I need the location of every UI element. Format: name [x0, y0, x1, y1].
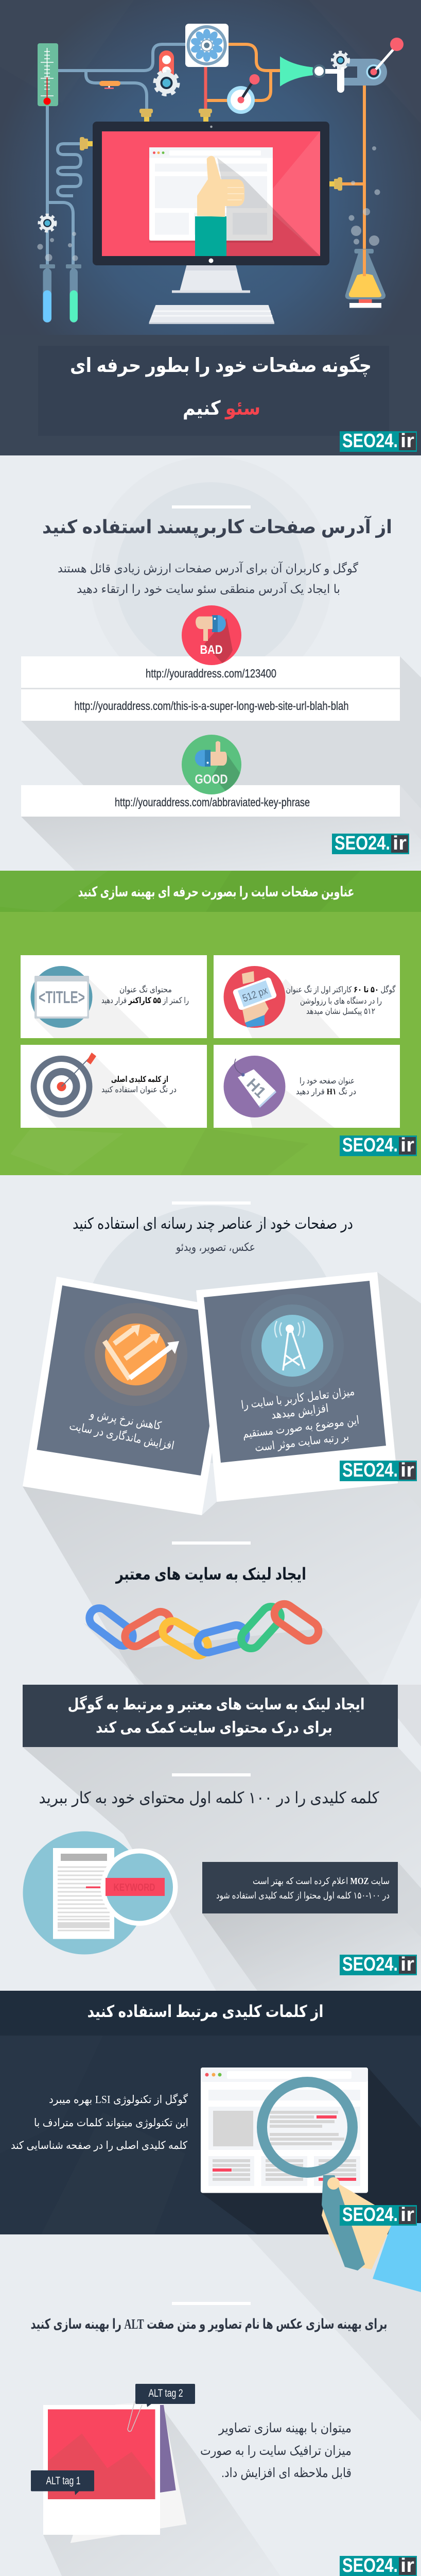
title line 1: چگونه صفحات خود را بطور حرفه ای — [70, 354, 372, 377]
card: H1: در تگ H۱ قرار دهید — [296, 1087, 356, 1097]
logo: SEO24. — [342, 430, 398, 452]
card: H1: H1 — [243, 1075, 269, 1101]
paragraph — [58, 561, 358, 596]
icon: good: GOOD — [195, 772, 227, 787]
icon: fan — [185, 24, 229, 67]
card: 512 px: 512 px — [241, 985, 269, 1005]
card: keyword in title: در تگ عنوان استفاده کنید — [101, 1084, 177, 1095]
logo: SEO24. — [335, 833, 390, 854]
card: H1 — [214, 1045, 400, 1128]
paragraph — [11, 2093, 188, 2151]
url box: good — [21, 785, 400, 817]
logo: ir — [400, 1460, 414, 1481]
heading: ایجاد لینک به سایت های معتبر — [115, 1565, 306, 1584]
icon: flask — [345, 249, 385, 308]
icon: magnifier and hand — [262, 2082, 421, 2292]
logo: ir — [400, 1134, 414, 1156]
paragraph: میزان ترافیک سایت را به صورت — [200, 2444, 352, 2458]
paragraph: قابل ملاحظه ای افزایش داد. — [221, 2466, 352, 2480]
tag: ALT 1 — [31, 2470, 94, 2495]
logo: ir — [400, 2204, 414, 2226]
panel: friendly URLs — [0, 455, 421, 871]
panel: title tag — [0, 871, 421, 1175]
browser window — [149, 147, 273, 243]
heading: کلمه کلیدی را در ۱۰۰ کلمه اول محتوای خود به کار ببرید — [39, 1789, 379, 1807]
card: keyword in title — [21, 1045, 207, 1128]
card: 512 px: گوگل ۵۰ تا ۶۰ کاراکتر اول از تگ عنوان — [286, 985, 396, 995]
url box: bad 2: http://youraddress.com/this-is-a-super-long-web-site-url-blah-blah — [74, 699, 349, 713]
icon: bad: BAD — [200, 643, 222, 657]
tag: ALT 1: ALT tag 1 — [46, 2475, 80, 2487]
icon: chain — [85, 1600, 322, 1659]
card: title tag: <TITLE> — [39, 988, 85, 1007]
paragraph: میتوان با بهینه سازی تصاویر — [218, 2421, 352, 2436]
icon: thumbs up hand — [195, 156, 244, 256]
icon: lever assembly — [332, 38, 404, 93]
pipes: grey-blue network — [47, 44, 185, 294]
logo: SEO24. — [342, 1134, 398, 1156]
icon: monitor — [93, 122, 329, 293]
logo: SEO24. — [342, 1460, 398, 1481]
icon: good — [182, 735, 241, 794]
callout: links: برای درک محتوای سایت کمک می کند — [96, 1719, 332, 1736]
icon: dial — [227, 74, 259, 114]
paragraph: کلمه کلیدی اصلی را در صفحه شناسایی کند — [11, 2140, 187, 2151]
pipes: orange and red — [206, 44, 364, 276]
title box — [38, 346, 389, 436]
icon: valve — [99, 81, 120, 89]
title line 2: سئو کنیم — [183, 398, 260, 420]
logo: ir — [400, 2555, 414, 2576]
card: H1: عنوان صفحه خود را — [300, 1077, 355, 1086]
card: bounce rate — [23, 1277, 236, 1515]
logo: ir — [400, 1954, 414, 1975]
card: title tag: را کمتر از ۵۵ کاراکتر قرار دهید — [101, 996, 189, 1006]
card: 512 px — [214, 955, 400, 1038]
heading: از کلمات کلیدی مرتبط استفاده کنید — [87, 2002, 323, 2021]
card: title tag: محتوای تگ عنوان — [119, 985, 172, 995]
tag: ALT 2 — [135, 2384, 195, 2407]
callout: moz: در ۱۰۰-۱۵۰ کلمه اول محتوا از کلمه کلیدی استفاده شود — [216, 1890, 390, 1901]
logo: ir — [400, 430, 414, 452]
browser window — [201, 2067, 368, 2193]
url box: bad 1 — [21, 656, 400, 689]
card: keyword in title: از کلمه کلیدی اصلی — [111, 1075, 168, 1084]
paragraph: با ایجاد یک آدرس منطقی سئو سایت خود را ارتقاء دهید — [77, 582, 340, 596]
panel: hero — [0, 0, 421, 455]
card: engagement — [196, 1272, 398, 1502]
card: 512 px: را در دستگاه های با رزولوشن — [300, 996, 382, 1006]
url box: bad 1: http://youraddress.com/123400 — [146, 667, 276, 680]
card: bounce rate: کاهش نرخ پرش و — [89, 1407, 163, 1433]
logo: ir — [393, 833, 407, 854]
card: engagement: این موضوع به صورت مستقیم — [242, 1413, 360, 1441]
icon: thermometer — [38, 43, 58, 106]
icon: test tubes — [39, 215, 81, 323]
paragraph: گوگل از تکنولوژی LSI بهره میبرد — [49, 2093, 188, 2106]
icon: bad — [182, 605, 241, 665]
paragraph: گوگل و کاربران آن برای آدرس صفحات ارزش زیادی قائل هستند — [58, 561, 358, 575]
callout: moz — [202, 1862, 421, 1991]
card: engagement: میزان تعامل کاربر با سایت را — [240, 1385, 355, 1411]
card: engagement: افزایش میدهد — [270, 1401, 329, 1422]
url box: bad 2 — [21, 689, 400, 721]
icon: connectors — [80, 109, 342, 191]
icon: signal with gear — [154, 50, 178, 95]
logo: SEO24. — [342, 2204, 398, 2226]
logo: SEO24. — [342, 2555, 398, 2576]
card: engagement: بر رتبه سایت موثر است — [254, 1430, 349, 1454]
bubbles — [37, 146, 380, 261]
card: title tag — [21, 955, 207, 1038]
url box: good: http://youraddress.com/abbraviated-key-phrase — [115, 795, 310, 809]
tag: ALT 2: ALT tag 2 — [148, 2387, 183, 2399]
panel: image ALT — [0, 2234, 421, 2576]
icon: horn — [280, 57, 340, 87]
card: bounce rate: افزایش ماندگاری در سایت — [68, 1419, 176, 1453]
callout: moz: سایت MOZ اعلام کرده است که بهتر است — [253, 1876, 390, 1887]
callout: links — [23, 1685, 398, 1747]
paragraph: این تکنولوژی میتواند کلمات مترادف با — [34, 2117, 188, 2129]
panel: multimedia and links — [0, 1175, 421, 1991]
callout: links: ایجاد لینک به سایت های معتبر و مرتبط به گوگل — [68, 1695, 364, 1714]
icon: keyboard — [149, 305, 274, 324]
card: 512 px: ۵۱۲ پیکسل نشان میدهد — [306, 1007, 375, 1016]
heading: در صفحات خود از عناصر چند رسانه ای استفاده کنید — [73, 1215, 353, 1232]
heading: از آدرس صفحات کاربرپسند استفاده کنید — [42, 515, 392, 538]
logo: SEO24. — [342, 1954, 398, 1975]
paragraph — [200, 2421, 352, 2480]
panel: LSI keywords — [0, 1991, 421, 2234]
icon: keyword document — [23, 1831, 178, 1955]
icon: photo stack — [31, 2384, 195, 2543]
icon: keyword document: KEYWORD — [113, 1882, 155, 1893]
subheading: عکس، تصویر، ویدئو — [176, 1241, 255, 1254]
